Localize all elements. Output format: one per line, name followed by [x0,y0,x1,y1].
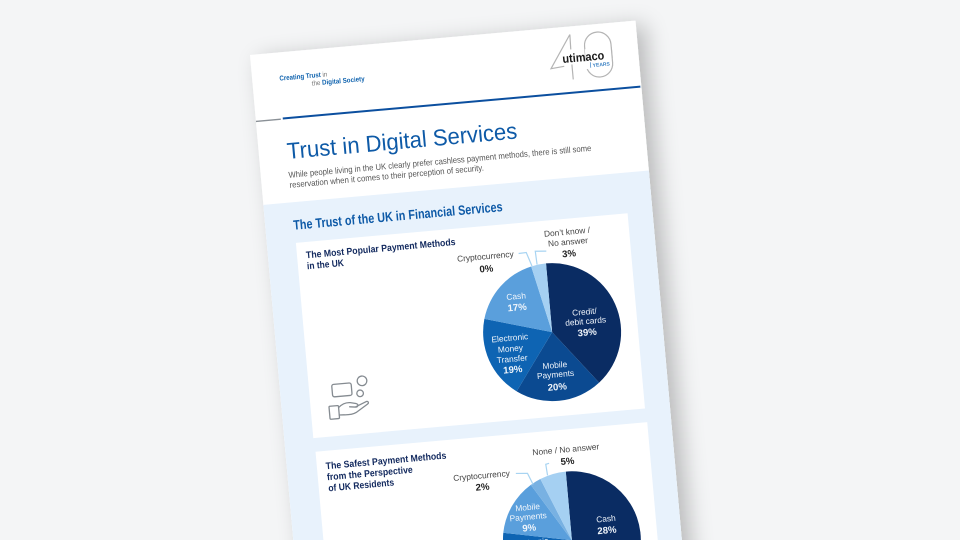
slice: cash [480,265,552,338]
card: safest payment methods [316,422,676,540]
card heading: The Safest Payment Methods [325,451,447,472]
card heading: The Most Popular Payment Methods [306,237,456,261]
card heading [306,237,457,272]
card: popular payment methods [296,213,645,438]
pie chart: popular payment methods [455,223,627,409]
slice: none / no answer [540,472,572,540]
inside labels: 28% [597,524,618,537]
icon: hand with coins [327,376,370,419]
outside labels [455,225,594,277]
card heading: from the Perspective [327,465,413,483]
logo: utimaco 40 years: YEARS [592,61,611,69]
slice: cash [566,465,642,540]
intro text: reservation when it comes to their perception of security. [289,163,484,190]
inside labels: Transfer [496,352,528,365]
outside labels: 3% [562,248,577,260]
pie chart: safest payment methods [451,438,647,540]
panel heading: The Trust of the UK in Financial Services [293,199,503,233]
outside labels: None / No answer [532,441,600,457]
outside labels: 5% [560,456,575,468]
inside labels: Payments [509,510,547,523]
inside labels: 20% [547,381,568,394]
inside labels: 39% [577,327,598,339]
slice: don't know [531,263,552,333]
inside labels: Mobile [515,501,541,513]
outside labels: 2% [475,482,490,494]
outside labels: 0% [479,263,494,276]
inside labels [508,494,618,540]
logo: utimaco 40 years: utimaco [562,48,605,66]
header rule [256,86,640,122]
panel: trust of the UK [263,171,700,540]
card heading [325,451,449,494]
header tagline: Creating Trust in [279,71,328,83]
outside labels: Cryptocurrency [453,468,511,483]
inside labels: debit cards [565,314,606,328]
slice: lower segment [502,521,645,540]
inside labels: Cash [506,290,527,302]
slice: credit/debit cards [546,257,626,386]
sheet background [250,21,699,540]
outside labels: Don’t know / [544,225,591,239]
title: Trust in Digital Services [286,118,518,164]
card heading: in the UK [307,258,344,272]
inside labels: Payments [537,368,574,381]
inside labels: 17% [507,302,528,314]
outside labels: Cryptocurrency [457,249,515,264]
header tagline [279,68,365,91]
outside labels: No answer [548,235,589,249]
intro text [288,143,593,190]
logo: utimaco 40 years [548,31,614,81]
slice: cryptocurrency [530,477,572,540]
slice: mobile payments [512,328,600,404]
inside labels: Credit/ [572,306,598,318]
slice: electronic money transfer [482,313,557,394]
inside labels: Electronic [491,331,529,344]
inside labels: Cash [596,513,616,524]
card heading: of UK Residents [328,478,395,494]
slice: mobile payments [499,482,572,540]
inside labels: Mobile [542,359,568,371]
inside labels: 19% [503,364,523,377]
leader lines [515,463,551,486]
tilted document sheet [250,21,700,540]
inside labels [487,283,612,399]
header tagline: the Digital Society [312,76,365,88]
intro text: While people living in the UK clearly prefer cashless payment methods, there is still some [288,143,592,180]
leader lines [519,250,548,267]
inside labels: 9% [522,522,537,535]
inside labels: Money [497,342,524,355]
outside labels [451,441,603,496]
